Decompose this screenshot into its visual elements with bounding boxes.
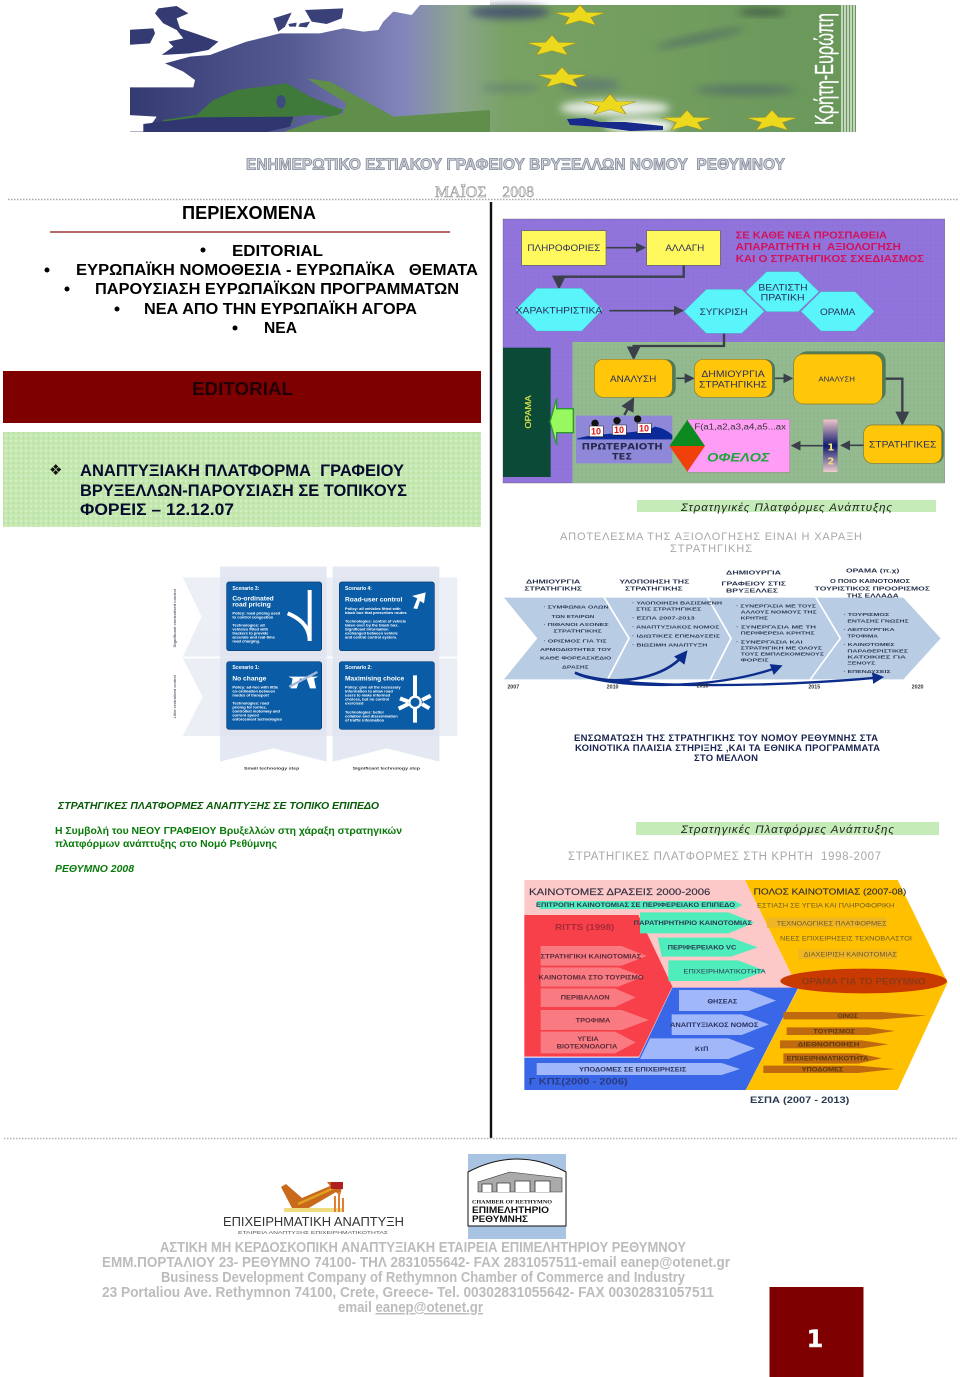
column bullets: ΚΡΗΤΗΣ: [741, 616, 768, 621]
logo: business development: ΕΤΑΙΡΕΙΑ ΑΝΑΠΤΥΞΗΣ ΕΠΙΧΕΙΡΗΜΑΤΙΚΟΤΗΤΑΣ: [238, 1230, 388, 1235]
box: create strategy: ΣΤΡΑΤΗΓΙΚΗΣ: [699, 380, 767, 390]
column bullets: ΔΡΑΣΗΣ: [562, 665, 589, 670]
chart: scenario matrix: [172, 566, 458, 770]
column bullets: · ΤΟΥΡΙΣΜΟΣ: [843, 612, 890, 617]
chart: innovation platforms 1998-2007: ΥΠΟΔΟΜΕΣ ΣΕ ΕΠΙΧΕΙΡΗΣΕΙΣ: [579, 1067, 686, 1074]
hexagon: comparison: [684, 289, 764, 333]
column bullets: ΠΕΡΙΦΕΡΕΙΑ ΚΡΗΤΗΣ: [741, 631, 815, 636]
logo: chamber of Rethymno: CHAMBER OF RETHYMNO: [472, 1200, 552, 1206]
icon: Crete island: [567, 118, 663, 131]
column bullets: · ΟΡΙΣΜΟΣ ΓΙΑ ΤΙΣ: [543, 638, 607, 643]
chart: innovation platforms 1998-2007: ΤΟΥΡΙΣΜΟΣ: [813, 1028, 855, 1035]
card: scenario 2: of traffic information: [345, 717, 385, 722]
panel: vision: [503, 348, 551, 477]
card: scenario 1: current speed: [232, 713, 259, 718]
curved arrows: [575, 653, 881, 685]
card: scenario 1: No change: [232, 676, 267, 683]
column bullets: · ΥΛΟΠΟΙΗΣΗ ΒΑΣΙΣΜΕΝΗ: [632, 601, 723, 606]
panel: editorial article: [3, 432, 481, 527]
vision ellipse: ΟΡΑΜΑ ΓΙΑ ΤΟ ΡΕΘΥΜΝΟ: [802, 976, 926, 986]
column bullets: · ΕΠΕΝΔΥΣΕΙΣ: [843, 669, 891, 674]
column bullets: · ΠΙΘΑΝΟΙ ΑΞΟΝΕΣ: [543, 622, 609, 627]
chart: innovation platforms 1998-2007: ΥΓΕΙΑ: [577, 1036, 599, 1043]
card: scenario 4: Significant information: [345, 627, 389, 632]
panel: editorial article: ΑΝΑΠΤΥΞΙΑΚΗ ΠΛΑΤΦΟΡΜΑ ΓΡΑΦΕΙΟΥ: [80, 461, 405, 480]
card: scenario 4: Technologies: control of vehicle: [345, 619, 407, 624]
axis labels: Significant centralised control: [172, 589, 177, 647]
card: scenario 1: Scenario 1:: [232, 665, 260, 671]
bar: options 1 and 2: [823, 419, 838, 472]
year labels: 2020: [912, 684, 924, 690]
subtitle: evaluation result: ΣΤΡΑΤΗΓΙΚΗΣ: [670, 543, 752, 555]
logo: chamber of Rethymno: ΕΠΙΜΕΛΗΤΗΡΙΟ: [472, 1205, 549, 1215]
column bullets: ΠΑΡΑΘΕΡΙΣΤΙΚΕΣ: [847, 648, 908, 653]
footer contact text: ΑΣΤΙΚΗ ΜΗ ΚΕΡΔΟΣΚΟΠΙΚΗ ΑΝΑΠΤΥΞΙΑΚΗ ΕΤΑΙΡΕΙΑ ΕΠΙΜΕΛΗΤΗΡΙΟΥ ΡΕΘΥΜΝΟΥ: [160, 1240, 686, 1256]
year labels: 2010: [607, 685, 619, 691]
contents list: EDITORIAL: [232, 243, 323, 260]
panel: priorities: 10: [591, 427, 601, 437]
chart: innovation platforms 1998-2007: ΚΑΙΝΟΤΟΜΙΑ ΣΤΟ ΤΟΥΡΙΣΜΟ: [538, 974, 644, 981]
column bullets: ΚΑΘΕ ΦΟΡΕΑΣΧΕΔΙΟ: [540, 656, 612, 661]
chart: innovation platforms 1998-2007: ΕΠΙΧΕΙΡΗΜΑΤΙΚΟΤΗΤΑ: [683, 968, 766, 975]
axis labels: Significant technology step: [353, 765, 421, 770]
card: scenario 4: black box that prescribes routes: [345, 610, 407, 615]
panel: priorities: ΠΡΩΤΕΡΑΙΟΤΗ: [582, 443, 663, 453]
footer contact text: [102, 1240, 730, 1316]
panel: vision: ΟΡΑΜΑ: [524, 395, 533, 429]
box: strategies: [864, 425, 944, 463]
card: scenario 4: Road-user control: [345, 596, 402, 603]
column headings: ΟΡΑΜΑ (π.χ): [846, 568, 900, 574]
column headings: ΓΡΑΦΕΙΟΥ ΣΤΙΣ: [721, 582, 786, 588]
chart: strategy timeline chevrons: [504, 568, 940, 691]
panel: editorial heading: [3, 371, 481, 423]
box: information: [522, 231, 606, 265]
column bullets: ΣΤΡΑΤΗΓΙΚΗ ΜΕ ΟΛΟΥΣ: [741, 645, 822, 650]
box: strategies: ΣΤΡΑΤΗΓΙΚΕΣ: [869, 440, 937, 450]
column bullets: · ΣΥΝΕΡΓΑΣΙΑ ΚΑΙ: [736, 639, 803, 644]
panel: editorial heading: EDITORIAL: [192, 379, 293, 399]
card: scenario 1: controlled motorway and: [232, 709, 280, 714]
column bullets: · ΚΑΙΝΟΤΟΜΕΣ: [843, 642, 895, 647]
column headings: ΔΗΜΙΟΥΡΓΙΑ: [726, 570, 781, 576]
card: scenario 3: trackers to provide: [232, 631, 269, 636]
newsletter title: ΕΝΗΜΕΡΩΤΙΚΟ ΕΣΤΙΑΚΟΥ ΓΡΑΦΕΙΟΥ ΒΡΥΞΕΛΛΩΝ ΝΟΜΟΥ ΡΕΘΥΜΝΟΥ: [246, 156, 785, 174]
chart: innovation platforms 1998-2007: ΠΕΡΙΒΑΛΛΟΝ: [561, 995, 610, 1002]
zone heading: innovative actions: ΚΑΙΝΟΤΟΜΕΣ ΔΡΑΣΕΙΣ 2000-2006: [529, 887, 710, 897]
card: scenario 4: and central control system.: [345, 635, 397, 640]
text: integration of strategy: ΚΟΙΝΟΤΙΚΑ ΠΛΑΙΣΙΑ ΣΤΗΡΙΞΗΣ ,ΚΑΙ ΤΑ ΕΘΝΙΚΑ ΠΡΟΓΡΑΜΜΑΤΑ: [575, 743, 880, 754]
chart: innovation platforms 1998-2007: ΘΗΣΕΑΣ: [707, 998, 737, 1005]
card: scenario 1: [227, 662, 322, 729]
card: scenario 4: exchanged between vehicle: [345, 631, 398, 636]
hexagon: comparison: ΣΥΓΚΡΙΣΗ: [700, 307, 748, 317]
column bullets: [540, 601, 909, 674]
card: scenario 4: Scenario 4:: [345, 586, 372, 592]
chart: innovation platforms 1998-2007: Γ ΚΠΣ(2000 - 2006): [529, 1077, 628, 1087]
chart: innovation platforms 1998-2007: ΠΑΡΑΤΗΡΗΤΗΡΙΟ ΚΑΙΝΟΤΟΜΙΑΣ: [634, 920, 752, 927]
column bullets: ΦΟΡΕΙΣ: [741, 657, 769, 662]
card: scenario 1: pricing for lorries,: [232, 705, 267, 710]
column bullets: ΤΩΝ ΕΤΑΙΡΩΝ: [552, 614, 595, 619]
vision ellipse: [780, 969, 947, 993]
footer contact text: ΕΜΜ.ΠΟΡΤΑΛΙΟΥ 23- ΡΕΘΥΜΝΟ 74100- ΤΗΛ 2831055642- FAX 2831057511-email eanep@otenet.gr: [102, 1255, 730, 1271]
card: scenario 2: [339, 662, 434, 729]
panel: benefit: [669, 419, 790, 472]
column bullets: · ΑΝΑΠΤΥΞΙΑΚΟΣ ΝΟΜΟΣ: [632, 625, 720, 630]
chart: innovation platforms 1998-2007: ΟΙΝΟΣ: [838, 1013, 858, 1020]
column bullets: ΤΟΥΣ ΕΜΠΛΕΚΟΜΕΝΟΥΣ: [741, 651, 824, 656]
year labels: 2015: [808, 684, 820, 690]
card: scenario 2: Technologies: better: [345, 709, 384, 714]
card: scenario 2: Maximising choice: [345, 676, 404, 683]
chart: innovation platforms 1998-2007: RITTS (1998): [555, 922, 615, 932]
column bullets: · ΒΙΩΣΙΜΗ ΑΝΑΠΤΥΞΗ: [632, 643, 708, 648]
subtitle: evaluation result: ΑΠΟΤΕΛΕΣΜΑ ΤΗΣ ΑΞΙΟΛΟΓΗΣΗΣ ΕΙΝΑΙ Η ΧΑΡΑΞΗ: [560, 531, 862, 543]
panel: priorities: 10: [614, 425, 624, 435]
card: scenario 3: Scenario 3:: [232, 586, 260, 592]
card: scenario 1: Policy: ad-hoc with little: [232, 685, 279, 690]
column bullets: ΞΕΝΟΥΣ: [847, 661, 876, 666]
panel: priorities: [576, 415, 672, 463]
diagram: strategic planning flowchart: [502, 218, 945, 484]
hexagon: best practice: ΒΕΛΤΙΣΤΗ: [758, 282, 808, 292]
chart: innovation platforms 1998-2007: ΑΝΑΠΤΥΞΙΑΚΟΣ ΝΟΜΟΣ: [670, 1022, 758, 1029]
hexagon: characteristics: ΧΑΡΑΚΤΗΡΙΣΤΙΚΑ: [516, 306, 602, 316]
card: scenario 3: to control congestion: [232, 615, 274, 620]
text: integration of strategy: ΣΤΟ ΜΕΛΛΟΝ: [694, 753, 758, 764]
hexagon: characteristics: [516, 288, 602, 331]
axis labels: Little centralised control: [172, 675, 177, 718]
column headings: [524, 568, 930, 600]
column headings: ΥΛΟΠΟΙΗΣΗ ΤΗΣ: [619, 580, 689, 586]
subtitle: platforms in Crete: ΣΤΡΑΤΗΓΙΚΕΣ ΠΛΑΤΦΟΡΜΕΣ ΣΤΗ ΚΡΗΤΗ 1998-2007: [568, 851, 881, 863]
box: create strategy: [694, 359, 775, 397]
text: local strategic platforms: ΡΕΘΥΜΝΟ 2008: [55, 863, 134, 875]
card: scenario 4: Policy: all vehicles fitted with: [345, 606, 401, 611]
card: scenario 3: road pricing: [232, 601, 271, 608]
logo: business development: [223, 1182, 404, 1235]
chart: innovation platforms 1998-2007: ΚτΠ: [695, 1046, 709, 1053]
pole items: ΤΕΧΝΟΛΟΓΙΚΕΣ ΠΛΑΤΦΟΡΜΕΣ: [777, 920, 887, 927]
pole items: ΔΙΑΧΕΙΡΙΣΗ ΚΑΙΝΟΤΟΜΙΑΣ: [804, 952, 897, 959]
hexagon: vision: ΟΡΑΜΑ: [820, 307, 855, 317]
box: change: ΑΛΛΑΓΗ: [665, 243, 704, 253]
panel: benefit: F(a1,a2,a3,a4,a5...ax: [694, 421, 787, 431]
blue arrows: [537, 990, 776, 1075]
panel: priorities: 10: [639, 423, 649, 433]
subtitle: evaluation result: [560, 531, 862, 555]
box: analysis small: ΑΝΑΛΥΣΗ: [818, 376, 855, 383]
year labels: 2010: [697, 683, 709, 689]
card: scenario 3: vehicles fitted with: [232, 627, 269, 632]
pole items: ΝΕΕΣ ΕΠΙΧΕΙΡΗΣΕΙΣ ΤΕΧΝΟΒΛΑΣΤΟΙ: [780, 936, 912, 943]
heading: local level: ΣΤΡΑΤΗΓΙΚΕΣ ΠΛΑΤΦΟΡΜΕΣ ΑΝΑΠΤΥΞΗΣ ΣΕ ΤΟΠΙΚΟ ΕΠΙΠΕΔΟ: [57, 800, 379, 812]
box: information: ΠΛΗΡΟΦΟΡΙΕΣ: [527, 243, 601, 253]
column headings: ΣΤΡΑΤΗΓΙΚΗΣ: [524, 587, 582, 593]
chart: innovation platforms 1998-2007: ΕΠΙΧΕΙΡΗΜΑΤΙΚΟΤΗΤΑ: [787, 1056, 869, 1063]
column headings: ΣΤΡΑΤΗΓΙΚΗΣ: [625, 587, 683, 593]
footer contact text: 23 Portaliou Ave. Rethymnon 74100, Crete, Greece- Tel. 00302831055642- FAX 00302831057511: [102, 1285, 714, 1301]
pole items: ΕΣΤΙΑΣΗ ΣΕ ΥΓΕΙΑ ΚΑΙ ΠΛΗΡΟΦΟΡΙΚΗ: [757, 903, 895, 910]
box: create strategy: ΔΗΜΙΟΥΡΓΙΑ: [701, 369, 765, 379]
logo: business development: ΕΠΙΧΕΙΡΗΜΑΤΙΚΗ ΑΝΑΠΤΥΞΗ: [223, 1215, 404, 1229]
chart: innovation platforms 1998-2007: ΠΕΡΙΦΕΡΕΙΑΚΟ VC: [668, 945, 737, 952]
pole items: [757, 903, 912, 959]
text: local strategic platforms: [55, 800, 402, 875]
teal arrows: [537, 901, 766, 981]
zone heading: ESPA: ΕΣΠΑ (2007 - 2013): [750, 1095, 849, 1105]
chart: innovation platforms 1998-2007: ΕΠΙΤΡΟΠΗ ΚΑΙΝΟΤΟΜΙΑΣ ΣΕ ΠΕΡΙΦΕΡΕΙΑΚΟ ΕΠΙΠΕΔΟ: [536, 902, 735, 909]
contents list: ΝΕΑ ΑΠΟ ΤΗΝ ΕΥΡΩΠΑΪΚΗ ΑΓΟΡΑ: [144, 300, 417, 318]
date: ΜΑΪΟΣ 2008: [435, 183, 534, 201]
panel: priorities: ΤΕΣ: [612, 453, 632, 463]
hexagon: best practice: ΠΡΑΤΙΚΗ: [761, 292, 805, 302]
column bullets: · ΙΔΙΩΤΙΚΕΣ ΕΠΕΝΔΥΣΕΙΣ: [632, 633, 720, 638]
box: analysis small: [794, 351, 886, 404]
paragraph: contribution: πλατφόρμων ανάπτυξης στο Νομό Ρεθύμνης: [55, 838, 278, 850]
column bullets: · ΛΕΙΤΟΥΡΓΙΚΑ: [843, 627, 896, 632]
card: scenario 3: accurate and real-time: [232, 635, 276, 640]
card: scenario 2: choices, but no control: [345, 697, 389, 702]
page number: 1: [807, 1325, 823, 1353]
card: scenario 3: [227, 582, 322, 651]
hexagon: vision: [801, 292, 874, 331]
contents block: [44, 202, 478, 337]
panel: editorial article: ΒΡΥΞΕΛΛΩΝ-ΠΑΡΟΥΣΙΑΣΗ ΣΕ ΤΟΠΙΚΟΥΣ: [80, 481, 407, 500]
red statement text: ΑΠΑΡΑΙΤΗΤΗ Η ΑΞΙΟΛΟΓΗΣΗ: [736, 242, 901, 253]
column bullets: ΕΝΤΑΣΗΣ ΓΝΩΣΗΣ: [847, 618, 909, 623]
panel: editorial article: ❖: [49, 461, 62, 479]
card: scenario 3: Co-ordinated: [232, 596, 274, 603]
paragraph: contribution: [55, 825, 402, 850]
footer contact text: Business Development Company of Rethymnon Chamber of Commerce and Industry: [161, 1270, 685, 1286]
panel: editorial article: ΦΟΡΕΙΣ – 12.12.07: [80, 500, 234, 519]
card: scenario 2: users to make informed: [345, 693, 391, 698]
year labels: [507, 683, 924, 691]
paragraph: contribution: Η Συμβολή του ΝΕΟΥ ΓΡΑΦΕΙΟΥ Βρυξελλών στη χάραξη στρατηγικών: [55, 825, 402, 837]
card: scenario 1: modes of transport: [232, 693, 269, 698]
card: scenario 1: enforcement technologies: [232, 717, 283, 722]
contents list: ΕΥΡΩΠΑΪΚΗ ΝΟΜΟΘΕΣΙΑ - ΕΥΡΩΠΑΪΚΑ ΘΕΜΑΤΑ: [76, 261, 478, 279]
card: scenario 4: taken over by the black box.: [345, 623, 399, 628]
card: scenario 2: Scenario 2:: [345, 665, 372, 671]
column bullets: ΣΤΡΑΤΗΓΙΚΗΣ: [553, 629, 602, 634]
card: scenario 1: co-ordination between: [232, 689, 276, 694]
chart: innovation platforms 1998-2007: ΣΤΡΑΤΗΓΙΚΗ ΚΑΙΝΟΤΟΜΙΑΣ: [541, 953, 641, 960]
zone heading: innovation pole: ΠΟΛΟΣ ΚΑΙΝΟΤΟΜΙΑΣ (2007-08): [754, 886, 907, 896]
card: scenario 2: Policy: give all the necessary: [345, 685, 401, 690]
column headings: ΔΗΜΙΟΥΡΓΙΑ: [526, 580, 581, 586]
column bullets: · ΣΥΝΕΡΓΑΣΙΑ ΜΕ ΤΟΥΣ: [736, 604, 816, 609]
contents list: ΠΑΡΟΥΣΙΑΣΗ ΕΥΡΩΠΑΪΚΩΝ ΠΡΟΓΡΑΜΜΑΤΩΝ: [95, 280, 459, 298]
column bullets: · ΣΥΝΕΡΓΑΣΙΑ ΜΕ ΤΗ: [736, 624, 817, 629]
contents list: [44, 243, 478, 337]
column headings: ΒΡΥΞΕΛΛΕΣ: [726, 588, 778, 594]
axis labels: [172, 589, 421, 770]
card: scenario 3: Technologies: all: [232, 623, 265, 628]
banner: map of Europe with stars: [127, 0, 856, 133]
card: scenario 1: Technologies: road: [232, 701, 269, 706]
chart: innovation platforms 1998-2007: ΥΠΟΔΟΜΕΣ: [802, 1067, 843, 1074]
hexagon: best practice: [746, 272, 819, 312]
card: scenario 3: Policy: road pricing used: [232, 611, 281, 616]
text: integration of strategy: [574, 733, 880, 764]
red statement text: ΚΑΙ Ο ΣΤΡΑΤΗΓΙΚΟΣ ΣΧΕΔΙΑΣΜΟΣ: [736, 254, 924, 265]
column headings: ΤΟΥΡΙΣΤΙΚΟΣ ΠΡΟΟΡΙΣΜΟΣ: [815, 586, 930, 592]
card: scenario 4: [339, 582, 434, 651]
text: integration of strategy: ΕΝΣΩΜΑΤΩΣΗ ΤΗΣ ΣΤΡΑΤΗΓΙΚΗΣ ΤΟΥ ΝΟΜΟΥ ΡΕΘΥΜΝΗΣ ΣΤΑ: [574, 733, 878, 744]
card: scenario 2: information to allow road: [345, 689, 393, 694]
contents list: ΝΕΑ: [264, 320, 297, 337]
box: analysis: ΑΝΑΛΥΣΗ: [610, 374, 656, 384]
card: scenario 2: exercised: [345, 701, 364, 706]
column headings: ΤΗΣ ΕΛΛΑΔΑ: [847, 594, 899, 600]
column headings: Ο ΠΟΙΟ ΚΑΙΝΟΤΟΜΟΣ: [830, 579, 910, 585]
column bullets: ΤΡΟΦΙΜΑ: [847, 633, 879, 638]
column bullets: ΑΛΛΟΥΣ ΝΟΜΟΥΣ ΤΗΣ: [741, 610, 817, 615]
red statement text: [736, 230, 924, 265]
axis labels: Small technology step: [244, 765, 300, 770]
box: analysis: [594, 359, 676, 397]
chart: innovation platforms 1998-2007: ΒΙΟΤΕΧΝΟΛΟΓΙΑ: [557, 1044, 618, 1051]
chart: innovation platforms 1998-2007: ΤΡΟΦΙΜΑ: [576, 1017, 611, 1024]
banner label: strategic platforms: [637, 500, 936, 514]
chart: innovation platforms 1998-2007: [524, 880, 948, 1105]
year labels: 2007: [507, 685, 519, 691]
contents heading: ΠΕΡΙΕΧΟΜΕΝΑ: [182, 202, 316, 223]
red statement text: ΣΕ ΚΑΘΕ ΝΕΑ ΠΡΟΣΠΑΘΕΙΑ: [736, 230, 887, 241]
column bullets: · ΣΥΜΦΩΝΙΑ ΟΛΩΝ: [543, 605, 610, 610]
banner label: strategic platforms: Στρατηγικές Πλατφόρμες Ανάπτυξης: [680, 502, 892, 514]
column bullets: ΣΤΙΣ ΣΤΡΑΤΗΓΙΚΕΣ: [636, 607, 702, 612]
column bullets: · ΕΣΠΑ 2007-2013: [632, 615, 695, 620]
bar: options 1 and 2: 2: [827, 457, 834, 468]
column bullets: ΚΑΤΟΙΚΙΕΣ ΓΙΑ: [847, 654, 907, 659]
column bullets: ΑΡΜΟΔΙΟΤΗΤΕΣ ΤΟΥ: [540, 647, 613, 652]
logo: chamber of Rethymno: [468, 1154, 566, 1239]
page number: [770, 1287, 864, 1377]
panel: benefit: ΟΦΕΛΟΣ: [707, 451, 771, 465]
tapered sector bars: [763, 1012, 927, 1073]
chart: innovation platforms 1998-2007: ΔΙΕΘΝΟΠΟΙΗΣΗ: [798, 1042, 860, 1049]
box: change: [647, 231, 720, 265]
banner label: strategic platforms 2: [636, 822, 939, 836]
card: scenario 2: collation and dissemination: [345, 713, 398, 718]
red arrows: [541, 946, 649, 1053]
card: scenario 3: road charging.: [232, 639, 260, 644]
logo: chamber of Rethymno: ΡΕΘΥΜΝΗΣ: [472, 1214, 529, 1224]
banner label: strategic platforms 2: Στρατηγικές Πλατφόρμες Ανάπτυξης: [680, 824, 894, 836]
arrow: green to vision: [550, 398, 573, 445]
footer contact text: email eanep@otenet.gr: [338, 1300, 483, 1316]
bar: options 1 and 2: 1: [827, 443, 834, 454]
